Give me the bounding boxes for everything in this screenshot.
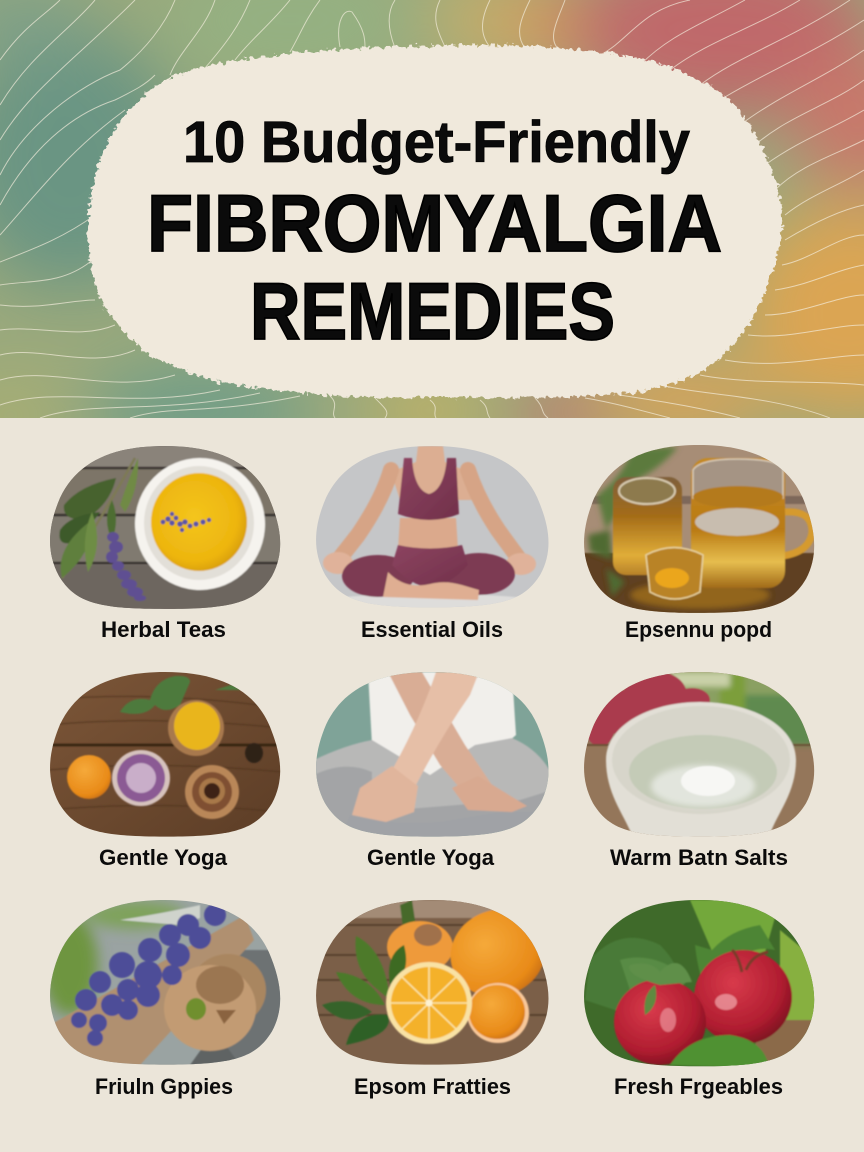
panel: Warm Bath Salts xyxy=(582,671,816,870)
contour lines xyxy=(0,0,864,418)
image: seated yoga pose xyxy=(314,446,552,610)
label: Essential Oils xyxy=(361,617,503,642)
label: Warm Batn Salts xyxy=(610,845,788,870)
label: Epsennu popd xyxy=(625,617,772,642)
gradient backdrop xyxy=(0,0,864,455)
image: bowl of tea with herbs xyxy=(48,446,282,609)
panel: Herbal Teas xyxy=(48,446,282,642)
image: crossed arms and grey trousers xyxy=(314,672,552,838)
panel: third tea remedy xyxy=(582,445,816,642)
label: Fresh Frgeables xyxy=(614,1074,783,1099)
title line 2: FIBROMYALGIA xyxy=(147,179,722,269)
panel: Gentle Yoga left xyxy=(48,672,282,870)
title xyxy=(147,110,722,357)
image: red apples with greens xyxy=(582,900,816,1068)
panel: header banner xyxy=(0,0,864,455)
title line 3: REMEDIES xyxy=(250,267,615,357)
title line 1: 10 Budget-Friendly xyxy=(183,110,690,175)
label: Friuln Gppies xyxy=(95,1074,233,1099)
panel: Friuln Gppies xyxy=(42,900,285,1099)
image: wooden board with small bowls xyxy=(48,672,282,838)
label: Epsom Fratties xyxy=(354,1074,511,1099)
panel: Fresh Frgeables xyxy=(582,900,816,1099)
image: oranges and leaves xyxy=(314,896,558,1066)
label: Herbal Teas xyxy=(101,617,226,642)
label: Gentle Yoga xyxy=(99,845,228,870)
image: white bowl of salts xyxy=(582,671,816,840)
label: Gentle Yoga xyxy=(367,845,495,870)
panel: Essential Oils xyxy=(314,446,552,642)
image: blueberries on wooden plank xyxy=(42,900,285,1070)
image: jar and mug of golden tea xyxy=(582,445,816,615)
panel: Epsom Fratties xyxy=(314,896,558,1099)
rough cream title blob xyxy=(88,45,782,398)
panel: Gentle Yoga centre xyxy=(314,672,552,870)
